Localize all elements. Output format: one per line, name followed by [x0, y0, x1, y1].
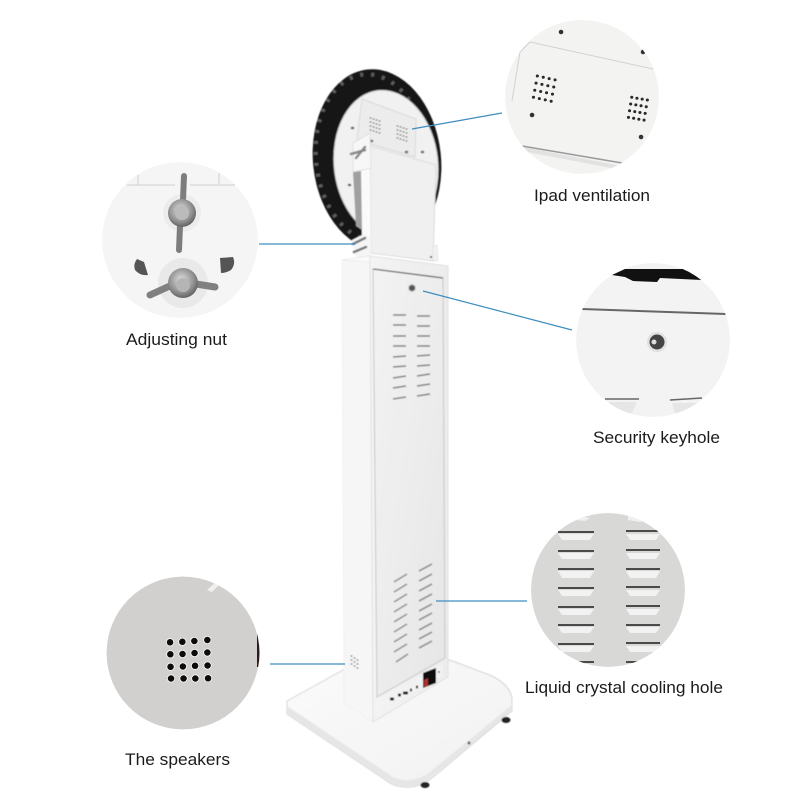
label: liquid crystal cooling hole: Liquid crystal cooling hole — [525, 679, 723, 697]
tablet back plate with ventilation — [349, 99, 423, 185]
leader line: ipad ventilation — [412, 113, 502, 129]
upper neck — [351, 133, 438, 261]
stand base — [287, 660, 512, 788]
product: photo booth stand — [287, 63, 512, 788]
circle: adjusting nut detail — [102, 162, 258, 318]
leader line: speakers — [270, 663, 345, 665]
label: the speakers: The speakers — [125, 751, 230, 769]
lower vent slots — [394, 564, 432, 662]
ring light — [304, 63, 450, 257]
circle: security keyhole detail — [576, 263, 730, 417]
column speaker grille — [351, 656, 358, 668]
label: adjusting nut: Adjusting nut — [126, 331, 227, 349]
label: security keyhole: Security keyhole — [593, 429, 720, 447]
ports and power socket — [386, 663, 443, 706]
leader line: cooling hole — [436, 600, 527, 602]
circle: ipad ventilation detail — [505, 20, 659, 174]
circle: speakers detail — [106, 576, 261, 730]
upper vent slots — [393, 315, 430, 399]
main column — [342, 256, 448, 722]
circle: cooling hole detail — [531, 513, 685, 667]
label: ipad ventilation: Ipad ventilation — [534, 187, 650, 205]
security keyhole on column — [408, 284, 416, 292]
leader line: security keyhole — [423, 291, 572, 330]
leader line: adjusting nut — [259, 243, 355, 245]
